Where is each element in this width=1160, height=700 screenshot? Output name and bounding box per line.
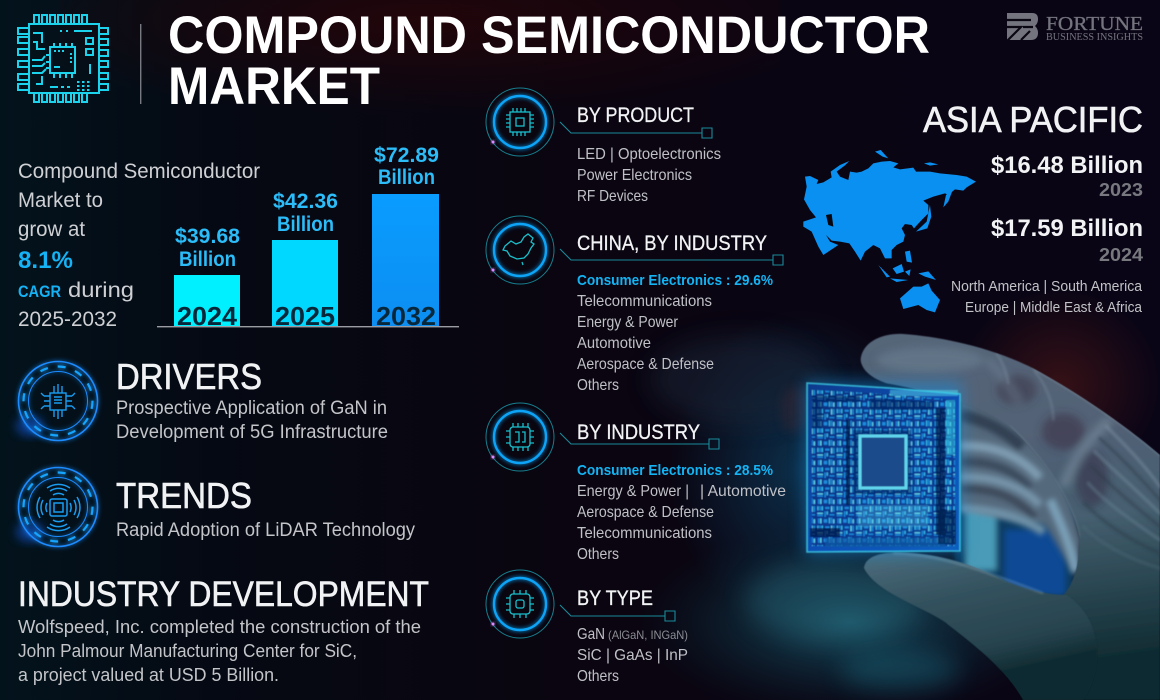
bar chart <box>157 144 459 331</box>
bar: 2032: 2032 <box>376 301 436 331</box>
drivers text: Prospective Application of GaN in <box>116 398 387 419</box>
list: Automotive <box>577 335 651 352</box>
list: Others <box>577 546 619 563</box>
icon: industry chip ring <box>486 403 554 471</box>
bar: 2024: $39.68 <box>175 225 240 248</box>
heading: BY INDUSTRY <box>577 421 700 444</box>
CAGR text block: Market to <box>18 189 103 212</box>
list: Energy & Power <box>577 314 679 331</box>
title <box>168 6 930 116</box>
thumb <box>864 553 1097 700</box>
list: Others <box>577 377 619 394</box>
CAGR text block: during <box>68 279 134 302</box>
Caspian Sea <box>826 214 833 227</box>
panel: by product <box>486 88 721 205</box>
CAGR text block: CAGR <box>18 282 61 301</box>
thumb rim <box>893 553 1043 593</box>
bar: 2025: Billion <box>277 213 334 236</box>
drivers text: Development of 5G Infrastructure <box>116 422 388 443</box>
list <box>577 272 773 394</box>
trends text: Rapid Adoption of LiDAR Technology <box>116 520 415 541</box>
drivers text: DRIVERS <box>116 356 262 397</box>
CAGR text block: grow at <box>18 218 85 241</box>
industry development: INDUSTRY DEVELOPMENT <box>18 575 429 614</box>
title: COMPOUND SEMICONDUCTOR <box>168 6 930 65</box>
header divider <box>140 24 141 104</box>
trends text <box>116 475 415 541</box>
other regions: North America | South America <box>951 279 1143 295</box>
glove shading and folds <box>880 348 1160 570</box>
list: Consumer Electronics : 29.6% <box>577 272 773 289</box>
list: Aerospace & Defense <box>577 504 714 521</box>
heading: BY PRODUCT <box>577 104 694 127</box>
heading: CHINA, BY INDUSTRY <box>577 232 767 255</box>
CAGR text block <box>18 160 260 331</box>
regional values: 2024 <box>1099 245 1143 265</box>
logo: Fortune Business Insights <box>1007 13 1143 43</box>
bar: 2032 <box>372 144 439 331</box>
other regions: Europe | Middle East & Africa <box>965 300 1143 316</box>
list: Consumer Electronics : 28.5% <box>577 462 773 479</box>
list: Aerospace & Defense <box>577 356 714 373</box>
list <box>577 462 786 563</box>
blurred middle fingers <box>958 395 1082 575</box>
industry development: Wolfspeed, Inc. completed the construction of the <box>18 617 421 637</box>
regional values <box>991 152 1143 265</box>
list <box>577 146 721 205</box>
islands and Australia <box>875 150 953 312</box>
regional heading: ASIA PACIFIC <box>923 99 1143 140</box>
bar: 2024: 2024 <box>177 301 238 331</box>
trends text: TRENDS <box>116 475 252 516</box>
list: Energy & Power | <box>577 483 689 500</box>
industry development: John Palmour Manufacturing Center for SiC, <box>18 641 357 661</box>
chip glow <box>805 382 962 554</box>
logo: Fortune Business Insights: BUSINESS INSIGHTS <box>1046 32 1143 43</box>
photo: gloved hand holding chip <box>805 334 1160 700</box>
icon: trends ring <box>16 468 98 546</box>
list <box>577 626 688 685</box>
list: Others <box>577 668 619 685</box>
bar: 2025: $42.36 <box>273 190 338 213</box>
heading: BY TYPE <box>577 587 653 610</box>
CAGR text block: 2025-2032 <box>18 308 117 331</box>
regional values: $17.59 Billion <box>991 215 1143 242</box>
industry development <box>18 575 429 685</box>
bar: 2024 <box>174 225 240 331</box>
icon: product chip ring <box>486 88 554 156</box>
bar: 2025 <box>272 190 338 331</box>
drivers text <box>116 356 388 443</box>
bar: 2025: 2025 <box>275 301 335 331</box>
list: GaN <box>577 626 605 643</box>
CAGR text block: 8.1% <box>18 247 73 274</box>
map: Asia Pacific <box>803 150 976 312</box>
panel: by industry <box>486 403 786 563</box>
list: | Automotive <box>700 483 786 500</box>
bar: 2032: $72.89 <box>374 144 439 167</box>
other regions <box>951 279 1143 316</box>
panel: china by industry <box>486 216 783 394</box>
logo: Fortune Business Insights: FORTUNE <box>1046 13 1143 35</box>
list: SiC | GaAs | InP <box>577 647 688 664</box>
regional values: 2023 <box>1099 180 1143 200</box>
glow gap between fingers <box>955 500 1075 600</box>
regional values: $16.48 Billion <box>991 152 1143 179</box>
industry development: a project valued at USD 5 Billion. <box>18 665 279 685</box>
icon: type chip ring <box>486 570 554 638</box>
bar: 2024: Billion <box>179 248 236 271</box>
bar: 2032: Billion <box>378 166 435 189</box>
title: MARKET <box>168 57 380 116</box>
list: LED | Optoelectronics <box>577 146 721 163</box>
list: Telecommunications <box>577 525 712 542</box>
top-left chip icon <box>18 15 108 102</box>
index finger and palm <box>861 334 1160 700</box>
icon: china map ring <box>486 216 554 284</box>
list: (AlGaN, INGaN) <box>608 628 688 642</box>
panel: by type <box>486 570 688 685</box>
list: Power Electronics <box>577 167 692 184</box>
CAGR text block: Compound Semiconductor <box>18 160 260 183</box>
list: Telecommunications <box>577 293 712 310</box>
list: RF Devices <box>577 188 648 205</box>
icon: drivers ring <box>16 362 98 440</box>
glowing microchip <box>807 383 960 552</box>
